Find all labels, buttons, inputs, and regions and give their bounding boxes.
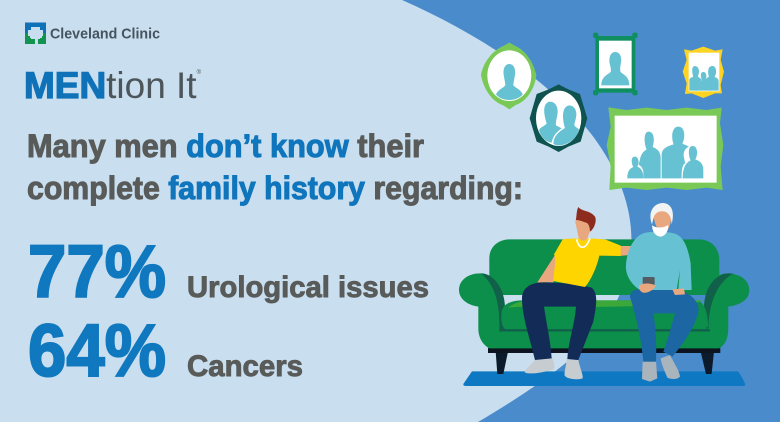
hair xyxy=(576,207,596,232)
heading: MENtion It: MENtion It xyxy=(24,65,197,106)
icon: logo cross xyxy=(25,22,46,44)
cushions xyxy=(501,300,708,330)
shoe left xyxy=(642,362,657,382)
headline line 1: Many men don’t know their xyxy=(27,128,424,164)
person: young man xyxy=(522,207,632,379)
hair xyxy=(650,203,673,224)
trousers xyxy=(630,289,698,362)
arm shadows xyxy=(481,273,733,330)
sofa back xyxy=(489,239,719,295)
heading: MENtion It: ® xyxy=(197,69,202,76)
rug xyxy=(463,371,745,386)
head xyxy=(653,208,672,235)
sweater xyxy=(626,232,692,290)
trousers xyxy=(522,282,596,360)
shoe left xyxy=(525,357,555,373)
logo: Cleveland Clinic xyxy=(25,22,160,44)
collar xyxy=(577,238,590,247)
shoe right xyxy=(565,359,583,379)
sofa legs xyxy=(496,352,714,374)
sofa base strip xyxy=(488,348,720,353)
shoe right xyxy=(661,355,680,379)
stat label: Cancers xyxy=(187,350,303,383)
stat label: Urological issues xyxy=(187,271,429,304)
phone and hands xyxy=(643,277,655,285)
sofa xyxy=(459,239,749,374)
headline text xyxy=(27,128,523,206)
frame: light green oval single portrait xyxy=(481,43,536,109)
scene: two men on sofa xyxy=(459,203,749,386)
neck and head xyxy=(575,213,592,241)
statistic: 77% urological issues xyxy=(28,230,429,313)
shirt xyxy=(553,238,621,287)
frame: yellow family portrait xyxy=(683,47,724,98)
frame: green rectangle single portrait xyxy=(593,33,638,95)
frame: dark green oval couple portrait xyxy=(530,84,587,152)
left arm xyxy=(537,255,562,282)
stat number 64%: 64% xyxy=(28,309,166,392)
person: older man xyxy=(626,203,698,382)
statistic: 64% cancers xyxy=(28,309,303,392)
blue curved background xyxy=(402,0,780,422)
headline line 2: complete family history regarding: xyxy=(27,170,523,206)
frame: large green family portrait xyxy=(607,107,723,190)
cushion seam xyxy=(499,327,710,334)
stat number 77%: 77% xyxy=(28,230,166,313)
family portrait frames xyxy=(481,33,724,190)
right arm xyxy=(617,246,632,256)
beard xyxy=(652,225,668,237)
left arm and lower body xyxy=(459,273,749,348)
logo wordmark: Cleveland Clinic xyxy=(50,26,160,42)
